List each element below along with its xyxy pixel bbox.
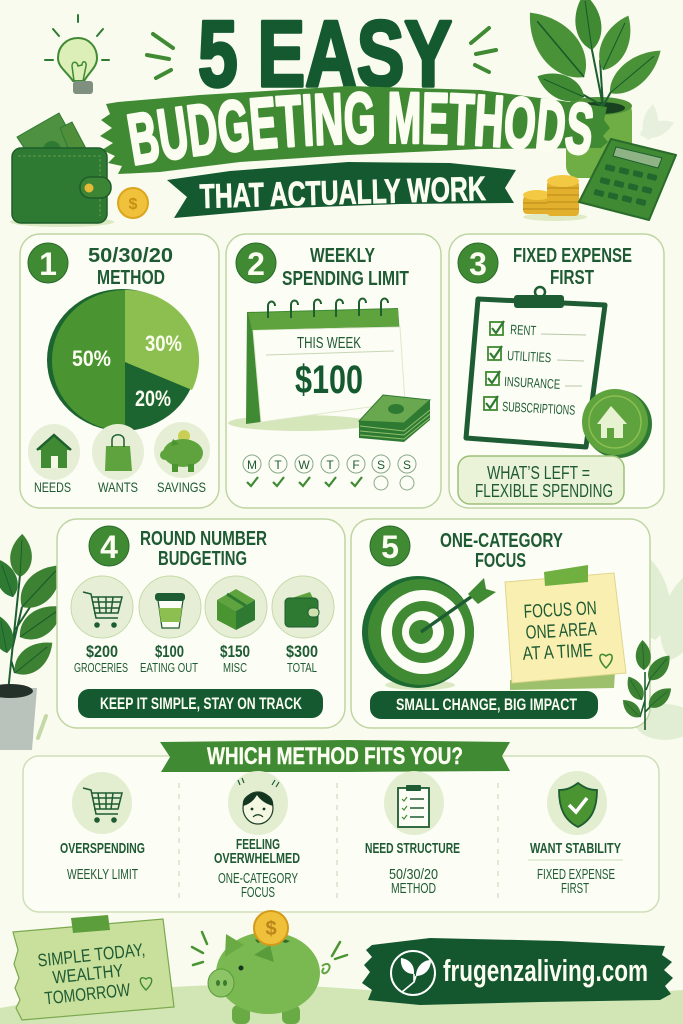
panel: which method fits you [23, 740, 659, 912]
heading: round number budgeting: BUDGETING [158, 548, 247, 570]
pill: small change big impact: SMALL CHANGE, BIG IMPACT [396, 695, 577, 714]
number badge 4 [89, 526, 129, 566]
number badge 1: 1 [39, 246, 57, 282]
fit: feeling overwhelmed [214, 771, 300, 901]
panel: fixed expense first [449, 234, 664, 508]
icon: right small plant [619, 640, 676, 730]
heading: one-category focus [440, 530, 563, 572]
week tracker: T [326, 458, 334, 472]
week tracker: W [298, 458, 310, 472]
ribbon: that actually work: THAT ACTUALLY WORK [199, 170, 486, 216]
category: needs: NEEDS [34, 479, 71, 495]
pie chart: 50% [72, 346, 111, 371]
icon: calculator [579, 139, 676, 220]
banner: budgeting methods: BUDGETING METHODS [126, 91, 594, 166]
week tracker: T [274, 458, 282, 472]
icon: clipboard checklist: RENT [510, 322, 537, 338]
callout: flexible spending [458, 456, 624, 504]
fit: need structure: NEED STRUCTURE [365, 840, 460, 857]
number badge 3: 3 [469, 246, 487, 282]
callout: flexible spending: FLEXIBLE SPENDING [475, 481, 613, 501]
icon: wallet with cash [10, 113, 114, 227]
heading: fixed expense first: FIRST [550, 267, 594, 289]
number badge 1 [28, 243, 68, 283]
fit: want stability: WANT STABILITY [530, 840, 621, 857]
dashed dividers [179, 783, 498, 898]
icon: piggy bank with coin [192, 911, 347, 1024]
heading: weekly spending limit [282, 245, 409, 290]
sticky note: simple today [13, 915, 174, 1020]
icon: target with arrow [362, 576, 496, 690]
fit: need structure: 50/30/20 [389, 866, 438, 883]
panel: weekly spending limit [226, 234, 441, 508]
category: savings: SAVINGS [157, 479, 206, 495]
icon: left potted plant [0, 533, 71, 750]
sticky note: simple today: TOMORROW [44, 980, 131, 1008]
icon: gold coin: $ [129, 196, 138, 213]
week tracker: S [377, 458, 385, 472]
icon: desk calendar: $100 [295, 358, 363, 402]
icon: coin stacks [523, 175, 587, 221]
fit: feeling overwhelmed: FEELING [236, 836, 280, 853]
sticky note: FOCUS ON [523, 598, 597, 623]
icon: gold coin [118, 188, 148, 218]
sticky note: ONE AREA [525, 619, 597, 644]
fit: feeling overwhelmed: ONE-CATEGORY [218, 870, 298, 887]
fit: feeling overwhelmed: OVERWHELMED [214, 850, 300, 867]
category: wants [92, 424, 144, 495]
sticky note: simple today: SIMPLE TODAY, [37, 939, 146, 971]
item: groceries: $200 [86, 642, 118, 661]
icon: pale background foliage [630, 555, 683, 740]
item: eating out: EATING OUT [140, 660, 198, 675]
pie chart [47, 289, 199, 431]
item: total: TOTAL [287, 660, 317, 675]
panel: one-category focus [351, 519, 650, 728]
icon: cash stack [359, 395, 430, 442]
fit: want stability [528, 771, 623, 897]
pill: small change big impact [370, 691, 598, 719]
heading: round number budgeting [140, 528, 267, 570]
heading: weekly spending limit: WEEKLY [310, 245, 376, 267]
ribbon: that actually work [167, 162, 516, 218]
category: needs [28, 424, 80, 495]
item: misc: MISC [223, 660, 247, 675]
sticky note [505, 565, 626, 690]
category: wants: WANTS [98, 479, 138, 495]
icon: desk calendar [228, 298, 405, 431]
icon: clipboard checklist [466, 287, 605, 447]
pie chart: 20% [135, 386, 171, 411]
week tracker: M [247, 458, 257, 472]
sticky note: AT A TIME [522, 640, 593, 665]
heading: one-category focus: FOCUS [475, 550, 526, 572]
panel: 50/30/20 method [20, 234, 219, 508]
ground [0, 985, 683, 1024]
fit: overspending: OVERSPENDING [60, 840, 145, 857]
icon: piggy bank with coin: $ [265, 918, 277, 940]
category: savings [154, 422, 210, 495]
item: misc [205, 576, 267, 675]
fit: want stability: FIRST [561, 880, 589, 897]
number badge 5 [370, 526, 410, 566]
icon: light bulb [45, 15, 109, 94]
item: total [272, 576, 334, 675]
icon: potted plant top right [515, 0, 676, 178]
panel: round number budgeting [57, 519, 345, 728]
week tracker [243, 455, 416, 490]
heading: one-category focus: ONE-CATEGORY [440, 530, 563, 552]
item: eating out [139, 576, 201, 675]
title: 5 EASY: 5 EASY [198, 1, 452, 106]
heading: fixed expense first [513, 245, 632, 289]
heading: weekly spending limit: SPENDING LIMIT [282, 268, 409, 290]
title dashes [147, 28, 496, 78]
number badge 4: 4 [100, 529, 118, 565]
icon: house coin [582, 389, 652, 458]
pill: keep it simple: KEEP IT SIMPLE, STAY ON TRACK [100, 694, 303, 713]
icon: clipboard checklist: UTILITIES [507, 348, 552, 365]
fit: overspending [60, 772, 145, 883]
callout: flexible spending: WHAT’S LEFT = [487, 463, 590, 483]
heading: fixed expense first: FIXED EXPENSE [513, 245, 632, 267]
week tracker: F [352, 458, 360, 472]
icon: clipboard checklist: INSURANCE [504, 374, 561, 392]
number badge 2: 2 [247, 246, 265, 282]
item: total: $300 [286, 642, 318, 661]
fit: need structure [365, 771, 460, 897]
fit: overspending: WEEKLY LIMIT [67, 866, 138, 883]
fit: want stability: FIXED EXPENSE [537, 866, 615, 883]
pill: keep it simple [78, 689, 323, 718]
fit: need structure: METHOD [391, 880, 436, 897]
fit: feeling overwhelmed: FOCUS [241, 884, 275, 901]
website badge [362, 938, 673, 1005]
pie chart: 30% [145, 331, 182, 356]
item: groceries [71, 576, 133, 675]
section banner [160, 740, 510, 772]
item: groceries: GROCERIES [74, 660, 128, 675]
heading: round number budgeting: ROUND NUMBER [140, 528, 267, 550]
number badge 2 [236, 243, 276, 283]
icon: clipboard checklist: SUBSCRIPTIONS [502, 399, 576, 418]
icon: desk calendar: THIS WEEK [297, 335, 361, 352]
heading: 50/30/20 method [88, 245, 173, 289]
logo: leaf [391, 951, 435, 995]
sticky note: simple today: WEALTHY [52, 960, 124, 988]
item: misc: $150 [220, 642, 250, 661]
heading: 50/30/20 method: 50/30/20 [88, 245, 173, 267]
week tracker: S [403, 458, 411, 472]
heading: 50/30/20 method: METHOD [97, 267, 165, 289]
number badge 3 [458, 243, 498, 283]
section banner: WHICH METHOD FITS YOU? [207, 743, 463, 770]
number badge 5: 5 [381, 529, 399, 565]
item: eating out: $100 [155, 642, 184, 661]
